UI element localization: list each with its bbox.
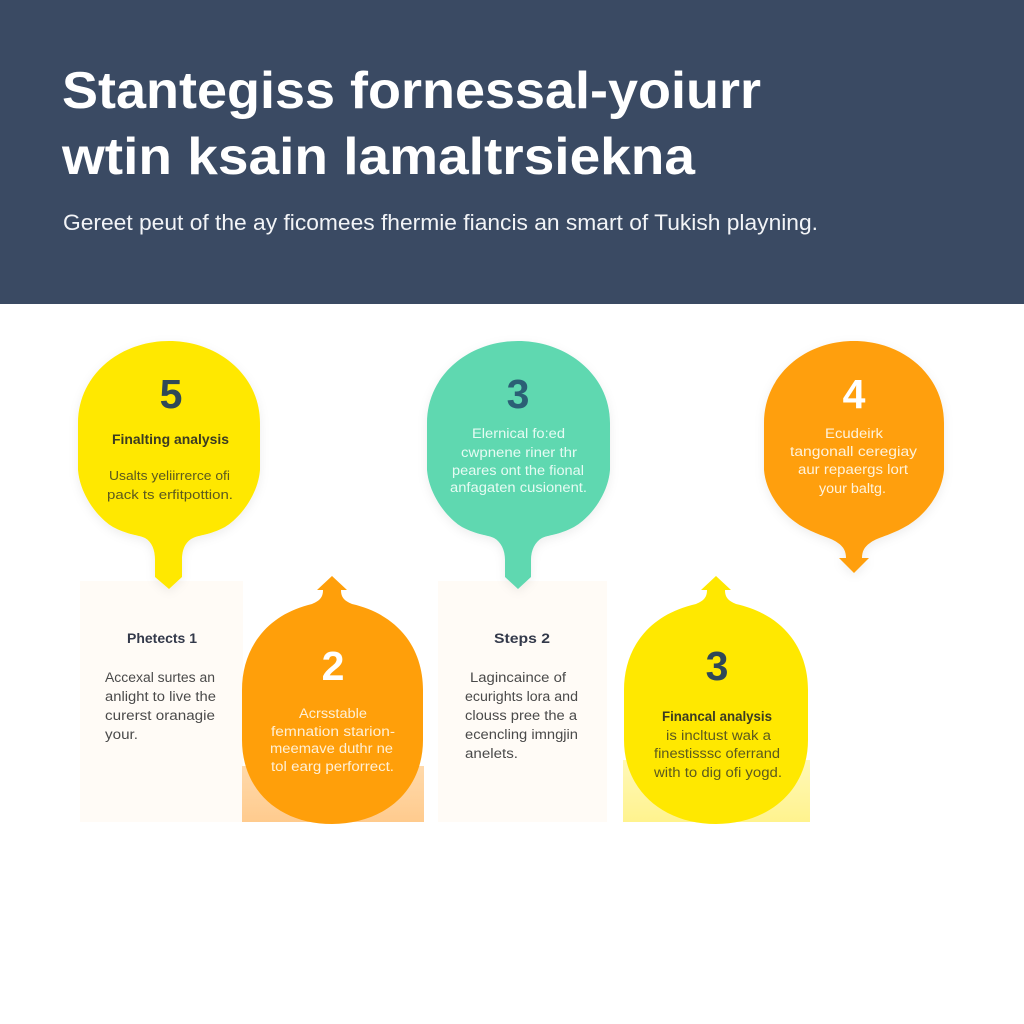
body text: meemave duthr ne xyxy=(270,741,393,756)
body text: cwpnene riner thr xyxy=(461,445,578,460)
panel: orange callout 4 xyxy=(764,341,944,573)
subtitle: Gereet peut of the ay ficomees fhermie fiancis an smart of Tukish playning. xyxy=(63,210,818,235)
card text: your. xyxy=(105,727,138,742)
body text xyxy=(107,468,233,502)
heading: Finalting analysis xyxy=(112,432,229,447)
card text xyxy=(105,670,216,742)
heading: Financal analysis xyxy=(662,709,772,724)
body text: Acrsstable xyxy=(299,706,367,721)
body text xyxy=(270,706,395,774)
panel: card Steps 2 xyxy=(438,581,607,822)
number: 3 xyxy=(507,371,529,417)
title: wtin ksain lamaltrsiekna xyxy=(61,128,696,186)
body text: peares ont the fional xyxy=(452,463,584,478)
body text xyxy=(790,426,917,496)
panel: yellow callout 3 xyxy=(623,576,810,824)
body text: is incltust wak a xyxy=(666,728,772,743)
card heading: Phetects 1 xyxy=(127,631,197,646)
card text: curerst oranagie xyxy=(105,708,215,723)
card text: anelets. xyxy=(465,746,518,761)
header banner xyxy=(0,0,1024,304)
number: 3 xyxy=(706,643,728,689)
body text: tangonall ceregiay xyxy=(790,444,917,459)
number: 2 xyxy=(322,643,344,689)
title: Stantegiss fornessal-yoiurr xyxy=(62,62,761,120)
body text xyxy=(653,728,782,780)
number: 4 xyxy=(843,371,866,417)
body text: finestisssc oferrand xyxy=(654,746,780,761)
panel: green callout 3 xyxy=(427,341,610,589)
number: 5 xyxy=(160,371,182,417)
body text: tol earg perforrect. xyxy=(271,759,394,774)
card text: ecencling imngjin xyxy=(465,727,578,742)
body text: Usalts yeliirrerce ofi xyxy=(109,468,230,483)
body text xyxy=(450,426,587,495)
title xyxy=(61,62,761,186)
panel: card Phetects 1 xyxy=(80,581,243,822)
card text: Lagincaince of xyxy=(470,670,566,685)
body text: aur repaergs lort xyxy=(798,462,908,477)
card text: anlight to live the xyxy=(105,689,216,704)
body text: anfagaten cusionent. xyxy=(450,480,587,495)
card text: ecurights lora and xyxy=(465,689,578,704)
card text: Accexal surtes an xyxy=(105,670,215,685)
body text: femnation starion- xyxy=(271,724,395,739)
body text: your baltg. xyxy=(819,481,886,496)
body text: with to dig ofi yogd. xyxy=(653,765,782,780)
body text: Elernical fo:ed xyxy=(472,426,565,441)
panel: orange callout 2 xyxy=(242,576,424,824)
body text: Ecudeirk xyxy=(825,426,883,441)
panel: yellow callout 5 xyxy=(78,341,260,589)
card text xyxy=(465,670,578,761)
body text: pack ts erfitpottion. xyxy=(107,487,233,502)
card text: clouss pree the a xyxy=(465,708,578,723)
card heading: Steps 2 xyxy=(494,631,550,646)
